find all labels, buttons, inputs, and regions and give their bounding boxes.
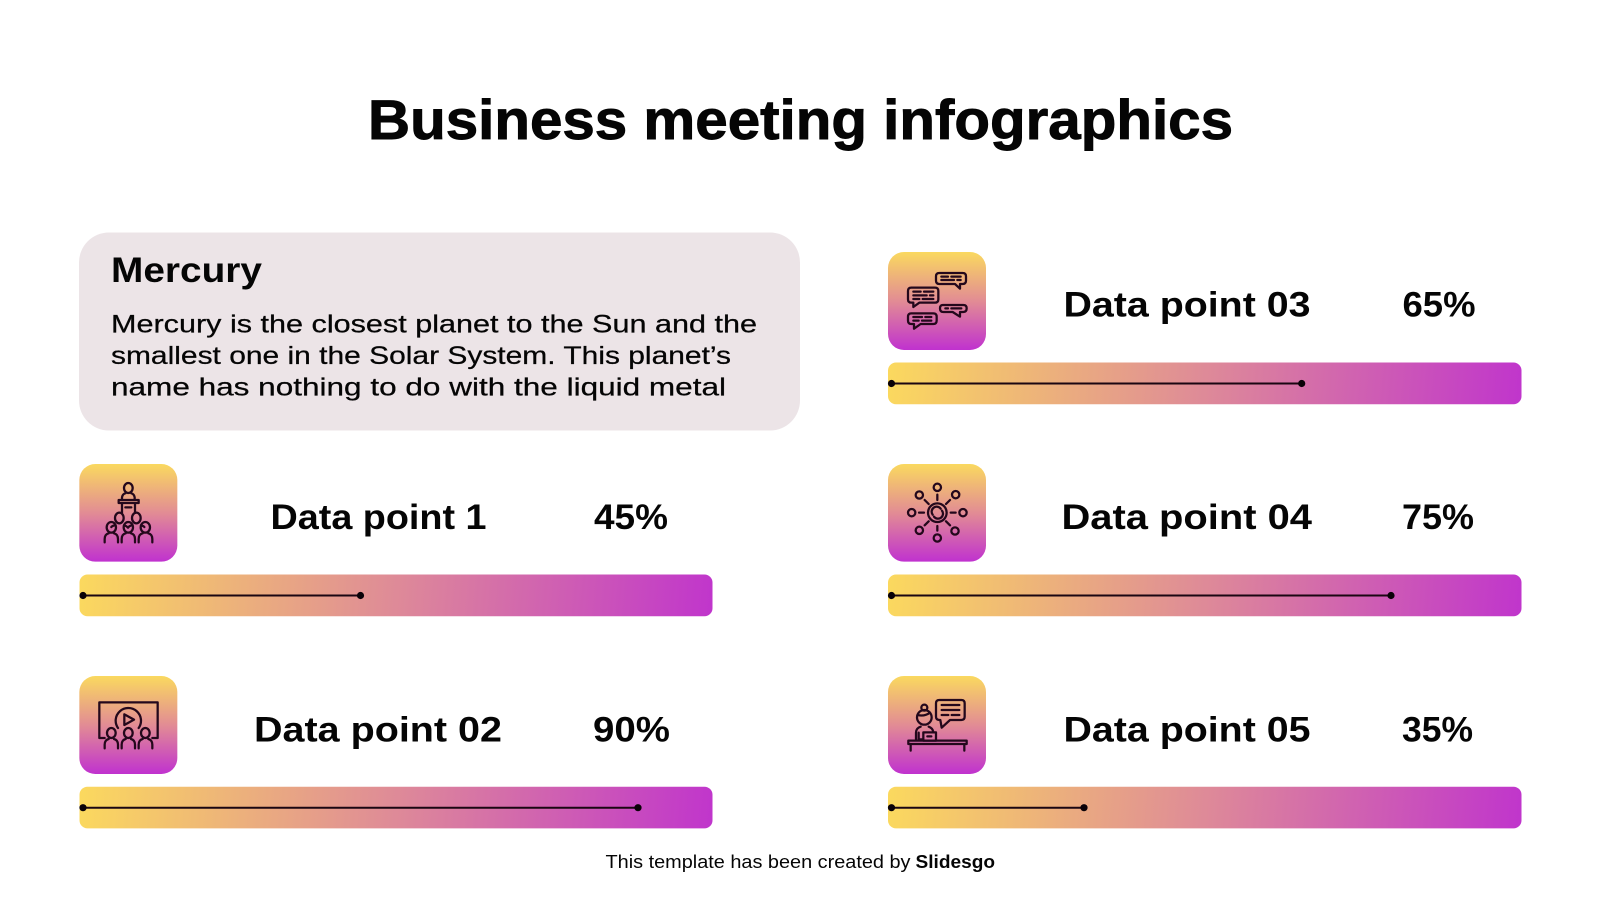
label: Data point 04 (1062, 498, 1313, 537)
panel body text: smallest one in the Solar System. This planet’s (111, 342, 731, 370)
label: Data point 05 (1064, 710, 1310, 750)
title: Business meeting infographics (368, 88, 1233, 151)
icon: speaker at podium with audience (79, 464, 177, 562)
label: Data point 03 (1064, 286, 1310, 324)
icon: network hub (888, 464, 986, 562)
label: Data point 02 (254, 710, 502, 750)
value: 75% (1402, 498, 1474, 537)
data row: Data point 03 (888, 252, 1522, 404)
footer credit: This template has been created by (606, 852, 910, 872)
icon: woman at desk with speech bubble (888, 676, 986, 774)
panel heading: Mercury (111, 251, 263, 290)
icon: chat bubbles (888, 252, 986, 350)
value: 35% (1402, 710, 1473, 750)
value: 45% (594, 498, 668, 537)
data row: Data point 02 (79, 676, 712, 828)
data row: Data point 1 (79, 464, 712, 616)
label: Data point 1 (270, 498, 486, 537)
data row: Data point 04 (888, 464, 1522, 616)
panel body text: name has nothing to do with the liquid metal (111, 374, 726, 402)
data row: Data point 05 (888, 676, 1522, 828)
panel body text (111, 311, 757, 402)
progress bar 90% (79, 787, 712, 828)
progress bar 75% (888, 574, 1522, 616)
value: 65% (1402, 286, 1476, 324)
progress bar 45% (79, 574, 712, 616)
footer credit: Slidesgo (916, 852, 995, 872)
progress bar 65% (888, 362, 1522, 404)
panel background (79, 232, 800, 430)
panel: Mercury (79, 232, 800, 430)
icon: audience watching screen (79, 676, 177, 774)
panel body text: Mercury is the closest planet to the Sun and the (111, 311, 757, 339)
progress bar 35% (888, 787, 1522, 828)
value: 90% (593, 710, 670, 750)
